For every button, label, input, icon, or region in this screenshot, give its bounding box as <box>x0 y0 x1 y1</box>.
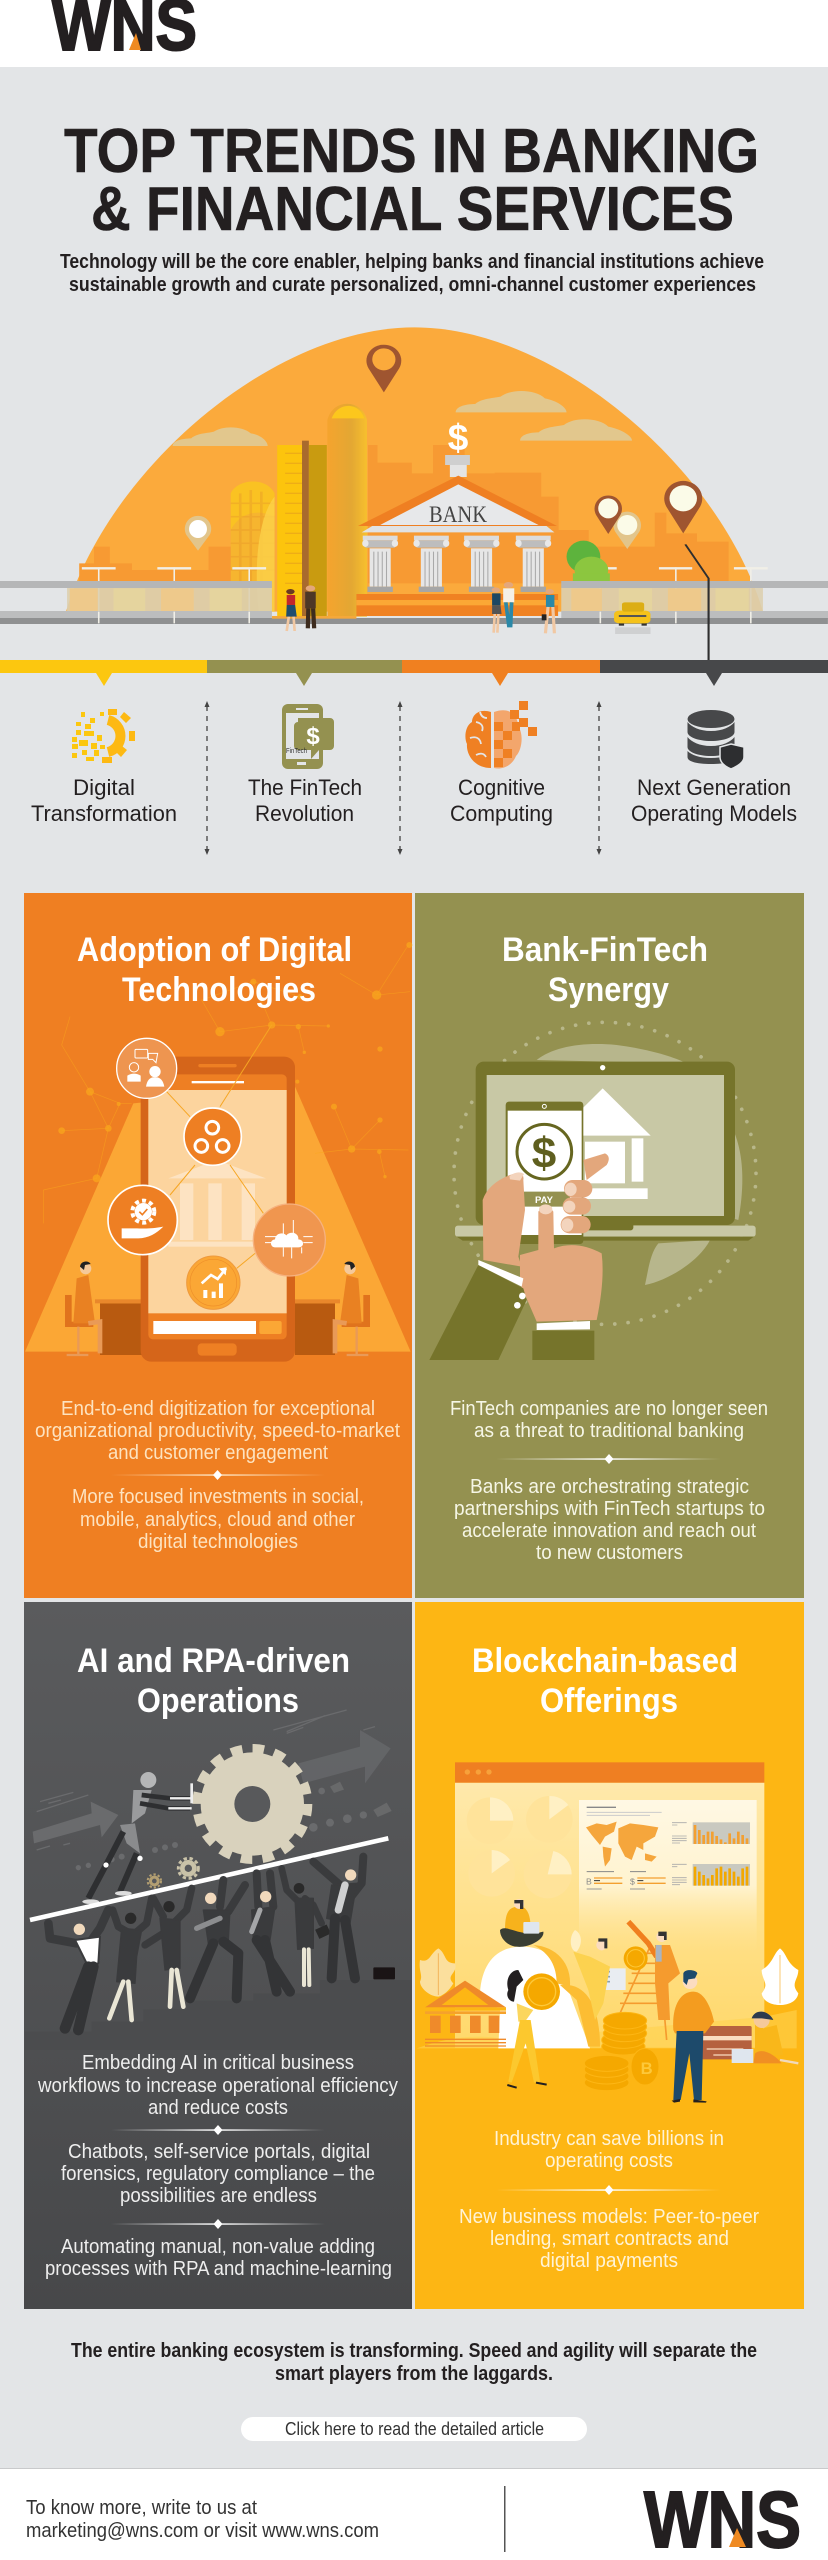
text: embedding AI <box>37 2052 398 2119</box>
text: investments: mobile, analytics, cloud and other <box>80 1509 355 1531</box>
small gears <box>148 1858 198 1888</box>
phone with pay button <box>506 1102 583 1244</box>
panel: AI and RPA-driven operations <box>24 1602 412 2309</box>
people: left pair <box>286 585 316 631</box>
bank dollar sign: $ <box>448 417 469 458</box>
cloud 3 <box>520 419 632 441</box>
illustration: dashboard window <box>455 1762 764 2048</box>
heading: Operations <box>137 1682 299 1720</box>
curved building <box>231 481 275 612</box>
closing statement <box>71 2340 757 2385</box>
closing statement: The entire banking ecosystem is transforming. Speed and agility will separate the <box>71 2340 757 2362</box>
coin stacks <box>584 2012 659 2091</box>
tree <box>567 541 610 583</box>
woman with laptop <box>732 2012 798 2063</box>
phone dollar sign: $ <box>532 1129 556 1178</box>
text: chatbots <box>61 2141 375 2207</box>
text: strategic partnerships: partnerships with FinTech startups to <box>454 1498 765 1520</box>
ladder <box>620 1947 667 2040</box>
woman carrying coin <box>507 1970 560 2088</box>
world map <box>586 1822 658 1867</box>
analyst with tablet <box>594 1968 626 1990</box>
footer <box>0 2468 828 2560</box>
desk and worker: left <box>65 1261 142 1355</box>
yellow tower <box>277 445 303 617</box>
text: savings: Industry can save billions in <box>494 2128 724 2150</box>
text: digitization: End-to-end digitization for exceptional <box>61 1398 375 1420</box>
text: embedding AI: Embedding AI in critical business <box>82 2052 354 2074</box>
panel: blockchain-based offerings <box>415 1602 804 2309</box>
sleeves <box>429 1260 594 1360</box>
text: strategic partnerships: to new customers <box>536 1542 683 1564</box>
text: embedding AI: and reduce costs <box>148 2097 288 2119</box>
text: digitization: and customer engagement <box>108 1442 328 1464</box>
text: no longer a threat <box>450 1398 768 1442</box>
subtitle: sustainable growth and curate personalized, omni-channel customer experiences <box>69 274 756 296</box>
icon: digital gear <box>72 709 135 763</box>
pin leader line <box>685 544 709 660</box>
label: the fintech revolution: The FinTech <box>248 775 362 800</box>
illustration: phone with digital icons <box>25 942 412 1362</box>
person 7 <box>313 1857 363 1978</box>
text: chatbots: possibilities are endless <box>120 2185 317 2207</box>
bank name: BANK <box>429 502 487 527</box>
text: no longer a threat: as a threat to traditional banking <box>474 1420 744 1442</box>
label: next generation operating models: Next Generation <box>637 775 791 800</box>
debit card <box>702 2026 752 2059</box>
label: next generation operating models: Operating Models <box>631 801 797 826</box>
hero illustration: bank city dome <box>0 327 828 660</box>
pie charts <box>467 1796 573 1898</box>
lifted beam <box>30 1838 388 1920</box>
label: digital transformation: Transformation <box>31 801 177 826</box>
heading: Offerings <box>540 1682 678 1720</box>
phone body <box>141 1057 295 1362</box>
skyline <box>79 445 729 583</box>
dashed double arrows <box>204 701 602 855</box>
label: digital transformation <box>31 775 177 826</box>
text: new business models: lending, smart contracts and <box>490 2228 729 2250</box>
icon: FinTech phone <box>282 704 334 769</box>
text: embedding AI: workflows to increase operational efficiency <box>37 2075 398 2097</box>
currency rows <box>587 1872 666 1889</box>
illustration: dashboard window: B <box>586 1876 592 1886</box>
text: chatbots: Chatbots, self-service portals, digital <box>68 2141 370 2163</box>
bank building <box>356 455 558 616</box>
illustration: laptop phone and hands <box>429 1022 756 1360</box>
background arrows <box>33 1710 392 1870</box>
icon circle: people chat <box>117 1038 177 1098</box>
map pin: left tan <box>185 516 211 551</box>
title: & FINANCIAL SERVICES <box>91 175 734 244</box>
leaf: right <box>762 1948 798 2005</box>
icon circle: gear in hand <box>108 1185 177 1255</box>
large gear <box>198 1750 307 1858</box>
contact text <box>26 2497 379 2542</box>
title: TOP TRENDS IN BANKING <box>64 117 759 186</box>
icon: FinTech phone: FinTech <box>286 748 307 755</box>
person 5 <box>252 1873 290 1992</box>
person 3 <box>145 1888 192 2007</box>
man on ladder and seated man <box>500 1899 680 2020</box>
illustration: team with coins: B <box>641 2059 653 2078</box>
label: the fintech revolution: Revolution <box>255 801 354 826</box>
robot <box>82 1772 192 1904</box>
roads and shopfronts <box>0 581 828 624</box>
heading <box>502 931 708 1009</box>
bank on screen <box>555 1088 651 1199</box>
taxi <box>614 602 650 634</box>
heading: Synergy <box>548 971 669 1009</box>
title <box>64 117 759 244</box>
data card <box>579 1800 757 1957</box>
heading <box>77 1642 350 1720</box>
bar chart top <box>672 1822 750 1844</box>
text: strategic partnerships: Banks are orchestrating strategic <box>470 1476 749 1498</box>
heading: Technologies <box>122 971 316 1009</box>
person 6 <box>282 1868 331 1985</box>
header bar <box>0 0 828 67</box>
hills <box>417 2010 797 2048</box>
stairs <box>25 1980 412 2050</box>
text: digitization: organizational productivity, speed-to-market <box>35 1420 400 1442</box>
cloud 1 <box>173 427 268 446</box>
leaf: left <box>420 1948 456 1997</box>
heading: AI and RPA-driven <box>77 1642 350 1680</box>
heading: Blockchain-based <box>472 1642 738 1680</box>
illustration: people lifting gear <box>25 1710 412 2050</box>
heading <box>77 931 352 1009</box>
label: the fintech revolution <box>248 775 362 826</box>
briefcase <box>373 1967 395 1979</box>
four-colour trend bar <box>0 660 828 686</box>
map pin: tan mid <box>614 512 641 549</box>
illustration: team with coins <box>417 1945 798 2103</box>
text: new business models: New business models: Peer-to-peer <box>459 2206 759 2228</box>
subtitle <box>60 251 764 296</box>
dome <box>66 327 763 612</box>
text: strategic partnerships: accelerate innovation and reach out <box>462 1520 756 1542</box>
pay button label: PAY <box>535 1195 554 1206</box>
text: strategic partnerships <box>454 1476 765 1564</box>
icon circle: network nodes <box>184 1108 241 1165</box>
people: right group <box>492 582 554 633</box>
label: cognitive computing: Computing <box>450 801 553 826</box>
map pin: brown mid <box>595 495 622 534</box>
cloud 2 <box>456 391 567 412</box>
icon: FinTech phone: $ <box>306 723 320 750</box>
man in navy <box>672 1970 714 2103</box>
text: savings <box>494 2128 724 2172</box>
connector lines <box>167 1025 272 1268</box>
bank small <box>425 1981 506 2046</box>
map pin: large brown <box>664 481 702 533</box>
closing statement: smart players from the laggards. <box>275 2363 553 2385</box>
panel: adoption of digital technologies <box>24 893 412 1598</box>
heading: Bank-FinTech <box>502 931 708 969</box>
team of people lifting <box>48 1857 363 2030</box>
call to action button: Click here to read the detailed article <box>285 2419 544 2439</box>
text: investments: More focused investments in social, <box>72 1486 364 1508</box>
map pin: top <box>366 345 401 392</box>
panel: bank-fintech synergy <box>415 893 804 1598</box>
contact text: To know more, write to us at <box>26 2497 257 2519</box>
icon: database with shield <box>688 710 744 769</box>
person 1 <box>48 1910 108 2030</box>
icon: cognitive brain <box>465 701 537 768</box>
person 2 <box>109 1898 152 2020</box>
label: cognitive computing: Cognitive <box>458 775 545 800</box>
text: new business models: digital payments <box>540 2250 678 2272</box>
contact text: marketing@wns.com or visit www.wns.com <box>26 2520 379 2542</box>
street lamps <box>99 567 751 623</box>
text: automating: Automating manual, non-value adding <box>61 2236 375 2258</box>
label: digital transformation: Digital <box>73 775 135 800</box>
bar chart bottom <box>672 1864 750 1886</box>
icon circle: cloud network <box>253 1204 325 1276</box>
text: automating <box>45 2236 392 2280</box>
illustration: dashboard window: $ <box>630 1876 635 1886</box>
label: next generation operating models <box>631 775 797 826</box>
text: investments: digital technologies <box>138 1531 298 1553</box>
heading: Adoption of Digital <box>77 931 352 969</box>
text: digitization <box>35 1398 400 1464</box>
text: investments <box>72 1486 364 1553</box>
text: no longer a threat: FinTech companies are no longer seen <box>450 1398 768 1420</box>
label: cognitive computing <box>450 775 553 826</box>
icon circle: growth chart <box>187 1256 240 1309</box>
tall tower <box>327 404 367 617</box>
text: savings: operating costs <box>545 2150 673 2172</box>
person 4 <box>190 1880 245 1998</box>
text: automating: processes with RPA and machine-learning <box>45 2258 392 2280</box>
desk and worker: right <box>295 1261 370 1355</box>
hands <box>483 1153 609 1322</box>
heading <box>472 1642 738 1720</box>
text: chatbots: forensics, regulatory compliance – the <box>61 2163 375 2185</box>
text: new business models <box>459 2206 759 2272</box>
